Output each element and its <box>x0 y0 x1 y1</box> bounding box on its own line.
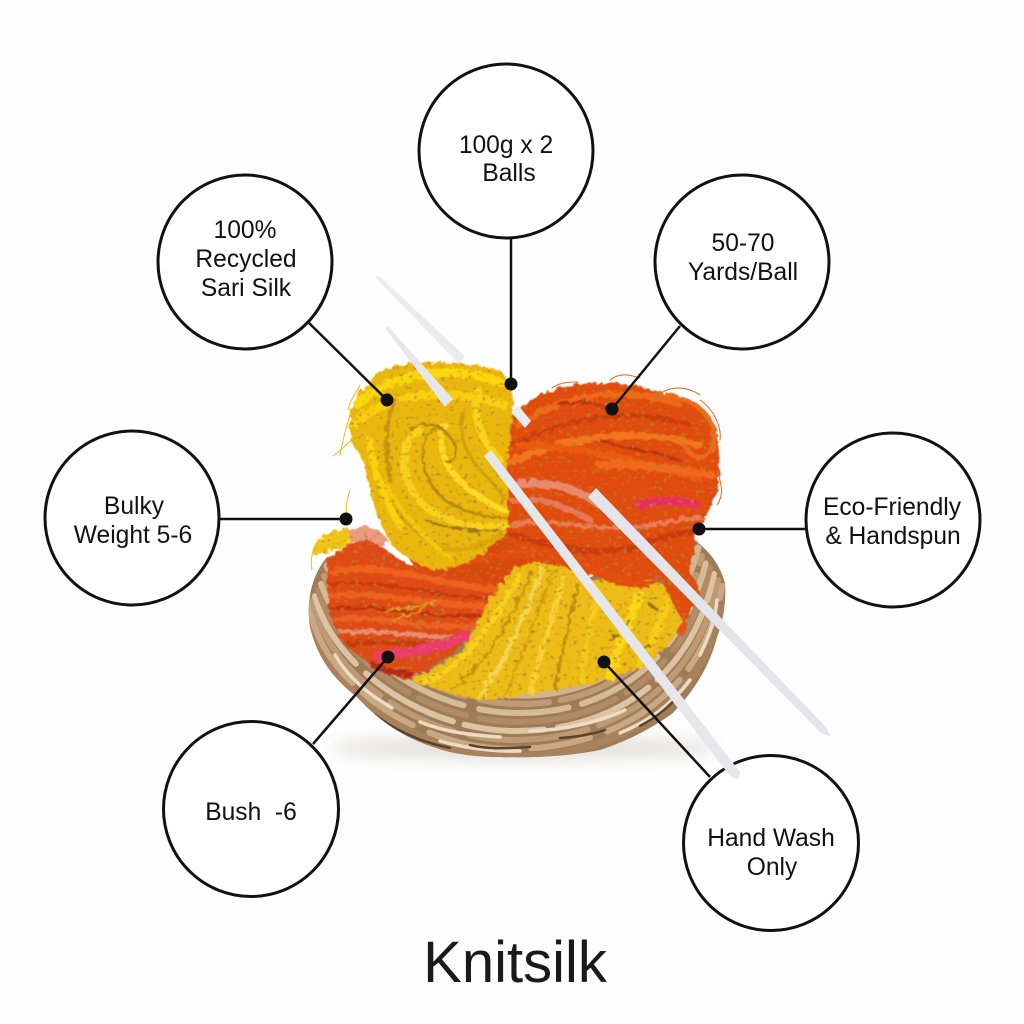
lower left orange skein <box>327 540 507 680</box>
callout: 50-70 Yards/Ball <box>606 175 829 416</box>
callout: Bush -6 <box>164 650 394 896</box>
callout: Eco-Friendly & Handspun: & Handspun <box>825 523 961 550</box>
callout: Hand Wash Only: Only <box>747 854 798 881</box>
yellow ball <box>350 362 513 570</box>
callout: 100% Recycled Sari Silk: Sari Silk <box>201 275 292 302</box>
title: Knitsilk: Knitsilk <box>423 930 608 995</box>
callout: Eco-Friendly & Handspun: Eco-Friendly <box>823 494 962 521</box>
callout: 100% Recycled Sari Silk: 100% <box>214 217 276 244</box>
callout: Hand Wash Only <box>598 656 858 930</box>
callout: 100% Recycled Sari Silk: Recycled <box>195 246 297 273</box>
callout: Bulky Weight 5-6 <box>45 431 352 605</box>
callout: Bulky Weight 5-6: Bulky <box>104 493 165 520</box>
callout: Hand Wash Only: Hand Wash <box>707 825 835 852</box>
basket shadow <box>330 736 720 760</box>
callout: 50-70 Yards/Ball: 50-70 <box>712 230 774 257</box>
lower yellow skein <box>410 562 685 700</box>
knitting needle back <box>375 276 831 737</box>
callout: 100g x 2 Balls: 100g x 2 <box>459 132 553 159</box>
orange ball <box>433 383 719 620</box>
stray fibres <box>311 375 722 570</box>
callout: 100g x 2 Balls <box>419 64 593 390</box>
fuzzy yarn strands <box>312 362 719 700</box>
callout: 100g x 2 Balls: Balls <box>482 160 536 187</box>
callout: Eco-Friendly & Handspun <box>692 433 980 607</box>
base fill between skeins <box>400 530 600 600</box>
callout: Bush -6: Bush -6 <box>205 799 297 826</box>
basket with yarn illustration <box>300 276 831 765</box>
callout: 50-70 Yards/Ball: Yards/Ball <box>688 259 798 286</box>
woven basket <box>300 535 730 765</box>
callout: Bulky Weight 5-6: Weight 5-6 <box>74 522 192 549</box>
yellow tuft at left <box>312 530 354 555</box>
knitting needle front <box>385 326 740 780</box>
callout: 100% Recycled Sari Silk <box>158 175 394 406</box>
peach wisp <box>348 526 388 549</box>
